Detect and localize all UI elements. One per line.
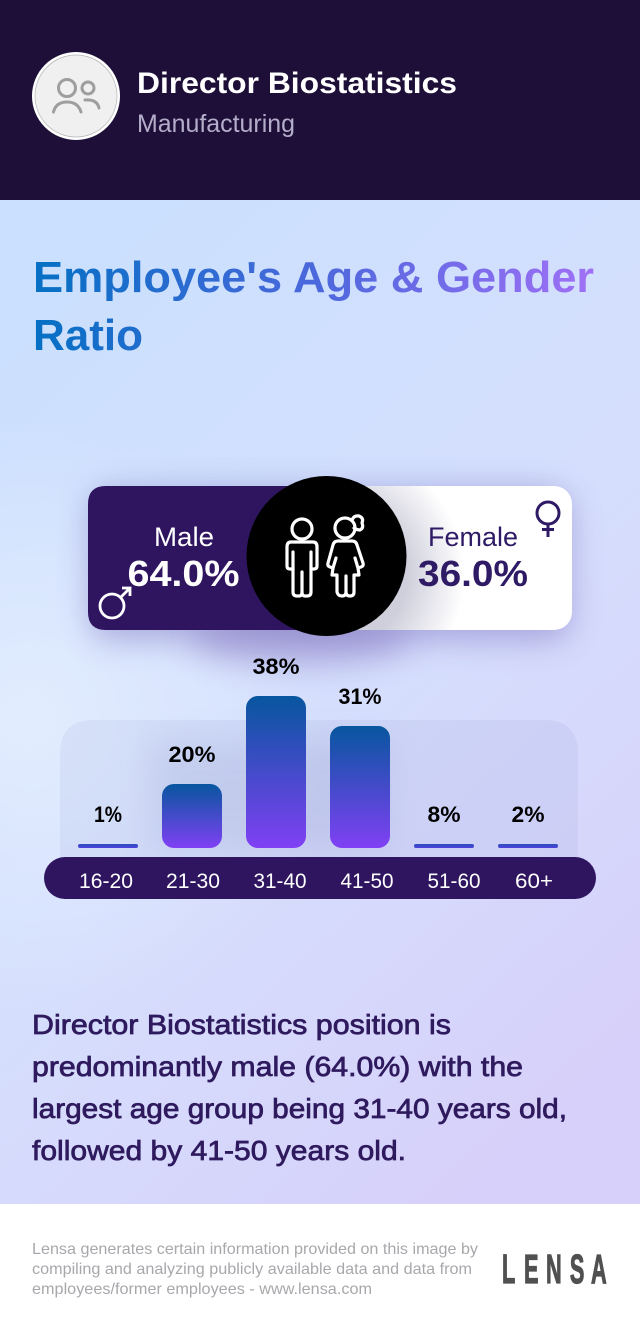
bar 41-50 [330, 684, 390, 848]
summary paragraph: followed by 41-50 years old. [32, 1135, 406, 1166]
axis pill with age labels: 21-30 [166, 870, 220, 893]
disclaimer text [32, 1241, 478, 1298]
bar 60+: 2% [512, 802, 544, 827]
axis pill with age labels: 41-50 [340, 870, 394, 893]
title: Employee's Age & Gender [33, 253, 594, 302]
logo: LENSA: LENSA [502, 1246, 607, 1292]
male label: Male [154, 522, 214, 552]
icon: male symbol [100, 588, 130, 618]
male percentage: 64.0% [128, 553, 240, 594]
summary paragraph [32, 1009, 567, 1166]
axis pill with age labels: 51-60 [428, 870, 480, 893]
icon: people avatar [32, 52, 120, 140]
page background [0, 200, 640, 1204]
header band [0, 0, 640, 200]
card shadow [90, 490, 570, 666]
panel: female [300, 486, 572, 630]
bar 16-20 [78, 802, 138, 848]
title: Ratio [33, 311, 143, 360]
bar 21-30 [162, 742, 222, 848]
panel: male [88, 486, 330, 630]
icon: female symbol [537, 502, 559, 537]
chart backdrop [60, 720, 578, 860]
bar 41-50: 31% [338, 684, 382, 709]
header title: Director Biostatistics [137, 67, 457, 100]
bar 21-30: 20% [168, 742, 216, 767]
summary paragraph: largest age group being 31-40 years old, [32, 1093, 567, 1124]
footer [0, 1204, 640, 1332]
axis pill with age labels [44, 857, 596, 899]
bar 16-20: 1% [94, 802, 122, 827]
summary paragraph: predominantly male (64.0%) with the [32, 1051, 523, 1082]
bar 31-40 [246, 654, 306, 848]
title [33, 253, 594, 360]
panel: gender ratio [88, 476, 572, 636]
summary paragraph: Director Biostatistics position is [32, 1009, 451, 1040]
bar 51-60: 8% [428, 802, 460, 827]
bar shadow [150, 740, 390, 850]
disclaimer text: employees/former employees - www.lensa.com [32, 1281, 372, 1298]
disclaimer text: compiling and analyzing publicly available data and data from [32, 1261, 472, 1278]
female label: Female [428, 522, 518, 552]
female percentage: 36.0% [418, 553, 528, 594]
bar 60+ [498, 802, 558, 848]
axis pill with age labels: 31-40 [254, 870, 306, 893]
header subtitle: Manufacturing [137, 110, 295, 138]
axis pill with age labels: 16-20 [79, 870, 133, 893]
bar 51-60 [414, 802, 474, 848]
panel: age chart [44, 654, 596, 899]
icon: black circle with figures [246, 476, 406, 636]
bar 31-40: 38% [252, 654, 300, 679]
disclaimer text: Lensa generates certain information provided on this image by [32, 1241, 478, 1258]
axis pill with age labels: 60+ [515, 870, 553, 893]
